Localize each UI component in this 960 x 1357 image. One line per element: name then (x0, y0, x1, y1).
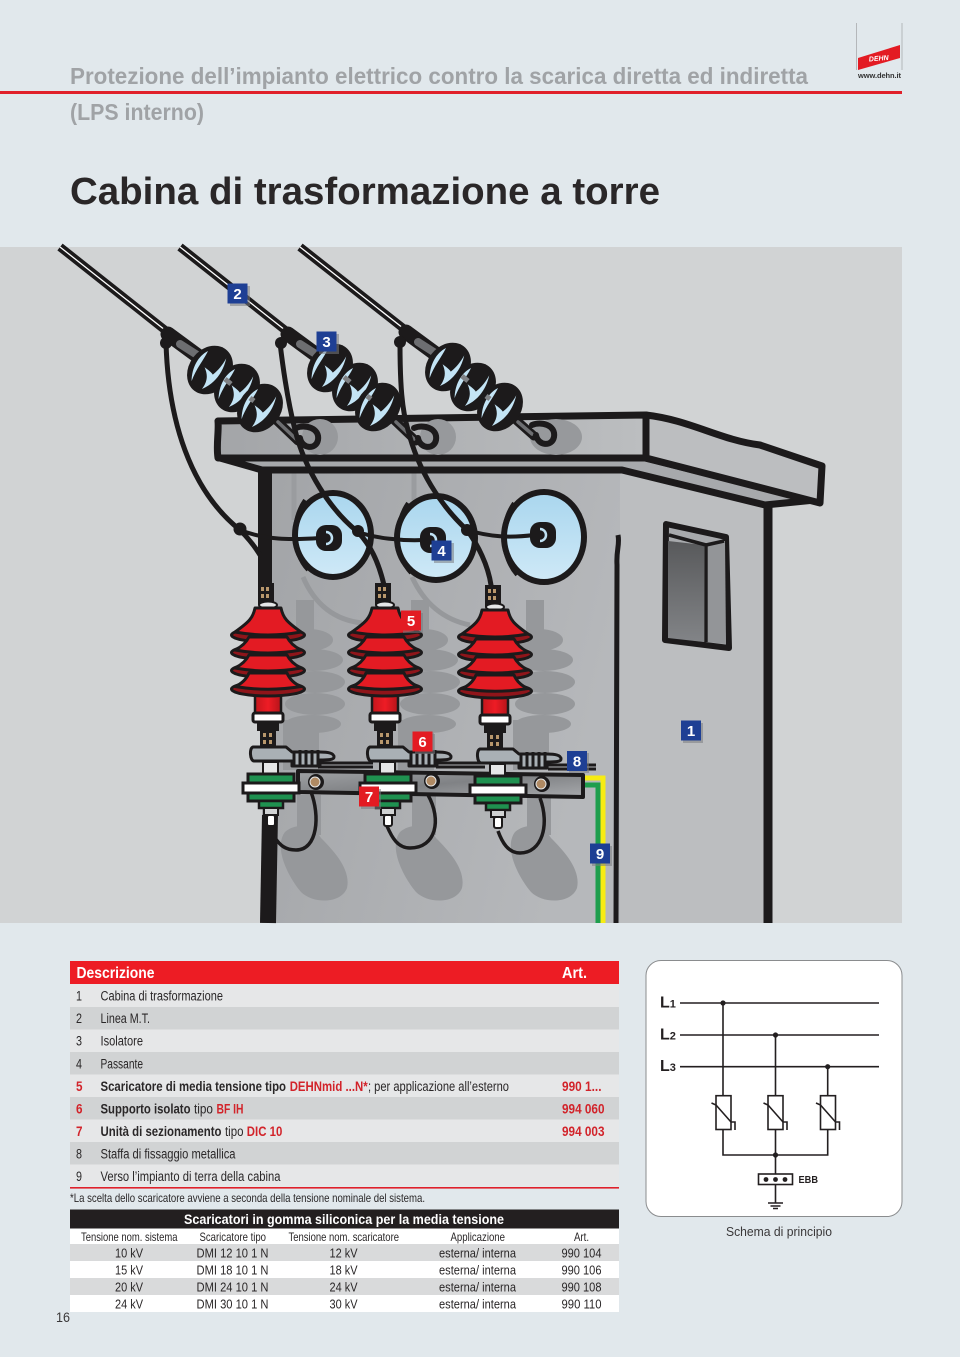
panel: circuit schematic (646, 960, 902, 1216)
table header (70, 961, 619, 984)
row 2 (76, 1011, 150, 1026)
row 4 (76, 1056, 143, 1072)
row 7: 7 (76, 1124, 82, 1139)
ground loops (275, 792, 544, 853)
data row 15 kV (70, 1261, 619, 1278)
row 3 (76, 1034, 143, 1048)
label 7: 7 (365, 789, 373, 806)
wall shadows (281, 470, 578, 901)
row 8: Staffa di fissaggio metallica (100, 1146, 236, 1162)
row 3: Isolatore (100, 1034, 143, 1048)
red header rule (0, 91, 902, 94)
table header: Descrizione (76, 965, 155, 982)
data row 24 kV: 990 110 (562, 1296, 602, 1312)
logo: DEHN: DEHN (869, 55, 890, 63)
row 6: Supporto isolato (100, 1102, 190, 1116)
bracket (staffa) (298, 771, 583, 797)
row 2: Linea M.T. (100, 1011, 150, 1026)
row 9: 9 (76, 1169, 82, 1184)
logo: DEHN (856, 23, 902, 80)
data row 10 kV: 10 kV (115, 1246, 143, 1260)
row 5: DEHNmid ...N* (290, 1079, 368, 1094)
row 7: DIC 10 (247, 1124, 282, 1139)
EBB label: EBB (798, 1175, 818, 1186)
label 1 (681, 720, 703, 743)
window (665, 524, 729, 648)
column headers (70, 1228, 619, 1244)
label 5: 5 (407, 613, 415, 630)
label 3: 3 (322, 334, 331, 351)
label 1: 1 (687, 723, 695, 740)
panel: silicone rubber arrester table (70, 1210, 619, 1312)
label 4: 4 (437, 543, 446, 560)
data row 20 kV: 24 kV (330, 1280, 358, 1294)
table title bar (70, 1210, 619, 1228)
row 5: Scaricatore di media tensione tipo (100, 1079, 286, 1094)
panel: description table (70, 961, 619, 1189)
circuit lines (680, 1003, 879, 1208)
table header: Art. (562, 965, 587, 982)
roof side (646, 415, 822, 503)
data row 10 kV: esterna/ interna (439, 1246, 517, 1260)
main heading: Cabina di trasformazione a torre (70, 171, 660, 213)
label 3 (316, 332, 339, 354)
column headers: Scaricatore tipo (200, 1230, 266, 1244)
illustration: transformer tower cabin (0, 247, 902, 923)
phase labels (660, 994, 676, 1075)
table title bar: Scaricatori in gomma siliconica per la media tensione (184, 1212, 504, 1227)
data row 24 kV: esterna/ interna (439, 1296, 517, 1312)
roof soffit (220, 458, 815, 505)
data row 10 kV: 990 104 (562, 1246, 602, 1260)
label 6 (412, 732, 435, 754)
data row 24 kV (70, 1295, 619, 1312)
row 7 (76, 1124, 605, 1139)
overhead conductors (60, 247, 408, 334)
side wall (620, 472, 770, 923)
data row 15 kV: 18 kV (330, 1262, 358, 1278)
header title: (LPS interno) (70, 99, 204, 125)
row 6: BF IH (216, 1102, 244, 1116)
bushings (passante) (295, 492, 584, 582)
data row 10 kV: 12 kV (330, 1246, 358, 1260)
column headers: Tensione nom. scaricatore (288, 1230, 399, 1244)
jumper wires (166, 342, 534, 585)
data row 15 kV: 990 106 (562, 1262, 602, 1278)
label 2 (228, 284, 250, 306)
front wall (262, 468, 622, 923)
data row 15 kV: esterna/ interna (439, 1262, 517, 1278)
data row 24 kV: 24 kV (115, 1296, 143, 1312)
label 4 (432, 540, 454, 563)
row 3: 3 (76, 1034, 82, 1048)
header title: Protezione dell’impianto elettrico contro la scarica diretta ed indiretta (70, 63, 808, 89)
schematic caption: Schema di principio (726, 1224, 832, 1239)
data row 10 kV (70, 1244, 619, 1261)
page number: 16 (56, 1309, 70, 1325)
earth conductor (585, 778, 603, 923)
label 8 (567, 751, 589, 773)
row 7: tipo (225, 1124, 244, 1139)
arrester 2 (DEHNmid) (348, 583, 451, 826)
label 7 (359, 786, 381, 809)
wall outlines (258, 470, 272, 585)
phase labels: L2 (660, 1026, 676, 1044)
label 8: 8 (573, 754, 581, 770)
row 6: tipo (194, 1102, 213, 1116)
data row 24 kV: DMI 30 10 1 N (196, 1296, 268, 1312)
label 9 (590, 844, 612, 866)
label 5 (401, 610, 423, 633)
insulators (168, 332, 554, 447)
row 6 (76, 1102, 604, 1116)
row 2: 2 (76, 1011, 82, 1026)
row 6: 6 (76, 1102, 83, 1116)
header title (70, 63, 808, 125)
row backgrounds (70, 984, 619, 1189)
data row 15 kV: 15 kV (115, 1262, 143, 1278)
junction dots (720, 1000, 830, 1182)
row 8: 8 (76, 1146, 82, 1162)
data row 15 kV: DMI 18 10 1 N (196, 1262, 268, 1278)
label 6: 6 (418, 734, 427, 751)
roof front beam (217, 415, 646, 458)
column headers: Applicazione (450, 1230, 505, 1244)
footnote: *La scelta dello scaricatore avviene a seconda della tensione nominale del sistema. (70, 1191, 425, 1205)
arrester 3 (DEHNmid) (458, 585, 561, 828)
row 6: 994 060 (562, 1102, 604, 1116)
column headers: Tensione nom. sistema (81, 1230, 178, 1244)
data row 10 kV: DMI 12 10 1 N (196, 1246, 268, 1260)
label 9: 9 (596, 846, 604, 863)
phase labels: L3 (660, 1058, 676, 1075)
bracket bolts (308, 773, 550, 792)
data row 20 kV: DMI 24 10 1 N (196, 1280, 268, 1294)
row 5: 990 1... (562, 1079, 602, 1094)
row 5 (76, 1079, 602, 1094)
data row 20 kV (70, 1278, 619, 1295)
column headers: Art. (574, 1230, 589, 1244)
logo: DEHN: www.dehn.it (857, 71, 902, 80)
row 4: Passante (100, 1056, 143, 1072)
row 7: 994 003 (562, 1124, 605, 1139)
row 1: Cabina di trasformazione (100, 988, 223, 1004)
data row 24 kV: 30 kV (330, 1296, 358, 1312)
row 7: Unità di sezionamento (100, 1124, 222, 1139)
row 1: 1 (76, 988, 82, 1004)
phase labels: L1 (660, 994, 676, 1012)
data row 20 kV: 20 kV (115, 1280, 143, 1294)
data row 20 kV: esterna/ interna (439, 1280, 517, 1294)
row 5: ; per applicazione all’esterno (368, 1079, 509, 1094)
arrester 1 (DEHNmid) (232, 583, 334, 826)
label 2: 2 (233, 286, 242, 303)
row 5: 5 (76, 1079, 83, 1094)
data row 20 kV: 990 108 (562, 1280, 602, 1294)
row 4: 4 (76, 1056, 82, 1072)
row 9: Verso l’impianto di terra della cabina (100, 1169, 281, 1184)
